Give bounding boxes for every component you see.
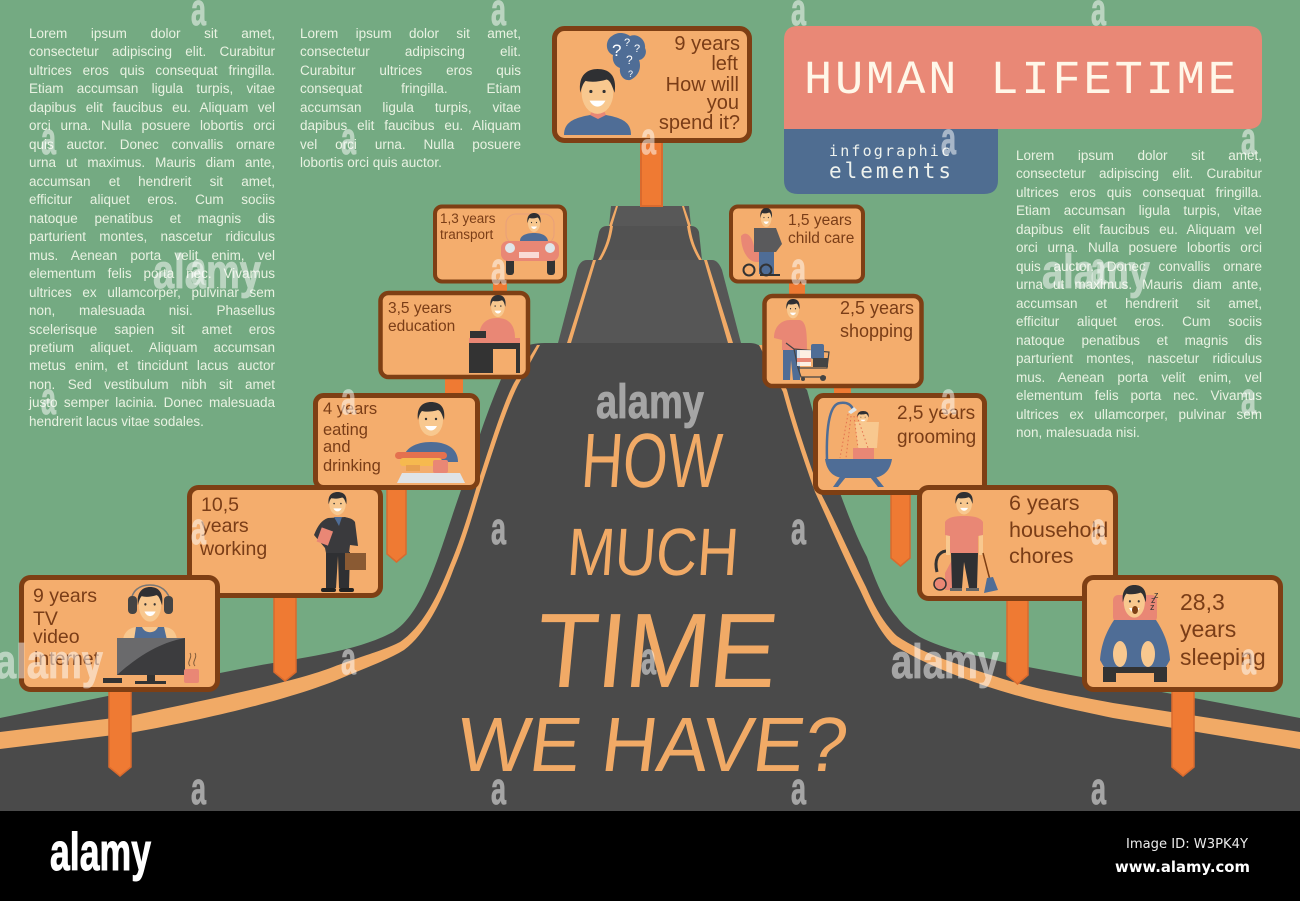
sign: 28,3 years sleeping — [1084, 578, 1280, 776]
text: 9 years left: left — [711, 53, 738, 75]
title banner: Human Lifetime: elements — [829, 159, 951, 183]
text: 2,5 years shopping: 2,5 years — [840, 298, 914, 318]
text: 4 years eating and drinking: eating — [323, 421, 368, 439]
text: 4 years eating and drinking: drinking — [323, 457, 381, 475]
watermark overlay: a — [341, 113, 357, 164]
text: 9 years TV video internet: internet — [34, 648, 100, 670]
watermark overlay: a — [191, 503, 207, 554]
watermark overlay: a — [491, 243, 507, 294]
watermark overlay: a — [341, 373, 357, 424]
sign: 1,3 years transport — [435, 206, 565, 294]
text block: left column: mus. Aenean porta velit enim, vel — [29, 248, 275, 263]
text: 28,3 years sleeping: 28,3 — [1180, 589, 1225, 615]
text block: right column: parturient montes, nascetur ridiculus — [1016, 351, 1262, 366]
text block: left column: scelerisque sapien sit amet eros — [29, 322, 275, 336]
text: 6 years household chores: 6 years — [1009, 491, 1080, 515]
text block: right column: Etiam accumsan ligula turpis, vitae — [1016, 203, 1262, 218]
text: 9 years left: you — [707, 92, 739, 114]
title banner: Human Lifetime: HUMAN LIFETIME — [804, 55, 1236, 108]
sign: 2,5 years shopping — [764, 296, 922, 398]
text: 10,5 years working: working — [199, 538, 267, 560]
icon: sleeping man in bed: z — [1151, 595, 1156, 605]
text block: right column: ultrices ex ullamcorper, pulvinar sem — [1016, 407, 1262, 422]
watermark overlay: a — [1091, 503, 1107, 554]
text block: middle column — [300, 26, 521, 170]
sign: 6 years household chores — [920, 488, 1116, 684]
text block: right column: efficitur aliquet eros. Cum sociis — [1016, 314, 1262, 329]
text block: right column: ultrices eros quis consequat fringilla. — [1016, 185, 1262, 200]
heading: How much time we have?: MUCH — [565, 515, 741, 590]
text block: middle column: consectetur adipiscing elit. — [300, 44, 521, 59]
heading: How much time we have?: HOW — [579, 418, 725, 504]
watermark overlay: a — [1091, 243, 1107, 294]
icon: thinking man: ? — [634, 43, 640, 55]
text block: left column: natoque penatibus et magnis dis — [29, 211, 275, 226]
text block: right column: elementum felis porta nec. Vivamus — [1016, 388, 1262, 403]
icon: sleeping man in bed — [1100, 585, 1170, 682]
sign: 4 years eating and drinking — [316, 396, 478, 562]
text block: left column: urna ut maximus. Mauris diam ante, — [29, 155, 275, 170]
text block: left column: justo semper lacinia. Donec malesuada — [29, 395, 275, 410]
text block: right column: quis auctor. Donec convallis ornare — [1016, 259, 1262, 274]
text block: left column: accumsan et hendrerit sit amet, — [29, 174, 275, 189]
text: 3,5 years education: 3,5 years — [388, 300, 452, 317]
sign: 3,5 years education — [380, 293, 528, 396]
footer band: alamy credit — [0, 811, 1300, 901]
text: 9 years left: How will — [666, 74, 739, 96]
text: 4 years eating and drinking: 4 years — [323, 400, 377, 418]
icon: man with vacuum and broom — [934, 492, 998, 593]
heading: How much time we have?: WE HAVE? — [453, 702, 852, 788]
watermark overlay: a — [191, 763, 207, 814]
sign: 9 years left — [554, 28, 750, 206]
icon: car — [501, 213, 559, 275]
text block: left column: dapibus elit faucibus eu. Aliquam vel — [29, 100, 275, 115]
watermark overlay: a — [1091, 763, 1107, 814]
text block: right column: natoque penatibus et magnis dis — [1016, 333, 1262, 348]
sign: 2,5 years grooming — [816, 396, 984, 566]
text block: right column: orci urna. Nulla posuere lobortis orci — [1016, 240, 1262, 255]
text block: middle column: accumsan ligula turpis, vitae — [300, 100, 521, 115]
text block: left column: consectetur adipiscing elit. Curabitur — [29, 44, 275, 59]
text block: left column — [28, 26, 275, 429]
text block: left column: ultrices ex ullamcorper, pulvinar sem — [29, 285, 275, 300]
footer band: alamy credit: alamy — [50, 823, 151, 882]
text: 6 years household chores: chores — [1009, 544, 1074, 568]
title banner: Human Lifetime — [784, 26, 1262, 194]
watermark overlay: a — [791, 503, 807, 554]
text block: middle column: consequat fringilla. Etiam — [300, 81, 521, 96]
icon: thinking man — [564, 33, 646, 135]
watermark overlay: a — [1241, 633, 1257, 684]
text: 1,5 years child care: 1,5 years — [788, 212, 852, 229]
text block: right column: mus. Aenean porta velit enim, vel — [1016, 370, 1262, 385]
text: 1,3 years transport: transport — [440, 227, 494, 242]
text block: left column: metus enim, et tincidunt lacus auctor — [29, 358, 275, 373]
sign: 10,5 years working — [190, 488, 380, 681]
text: 3,5 years education: education — [388, 318, 455, 335]
watermark overlay: a — [41, 373, 57, 424]
text block: right column: accumsan et hendrerit sit amet, — [1016, 296, 1262, 311]
text: 28,3 years sleeping: years — [1180, 616, 1236, 642]
watermark overlay: alamy — [891, 636, 999, 689]
text: 9 years left: 9 years — [674, 33, 740, 55]
watermark overlay: a — [941, 373, 957, 424]
icon: thinking man: ? — [624, 37, 630, 49]
title banner: Human Lifetime: infographic — [829, 142, 950, 160]
footer band: alamy credit: www.alamy.com — [1115, 858, 1250, 876]
watermark overlay: alamy — [596, 376, 704, 429]
watermark overlay: a — [41, 113, 57, 164]
text block: right column: dapibus elit faucibus eu. Aliquam vel — [1016, 222, 1262, 237]
text: 6 years household chores: household — [1009, 518, 1108, 542]
text block: left column: hendrerit lacus vitae sodales. — [29, 414, 204, 429]
text block: middle column: Lorem ipsum dolor sit amet, — [300, 26, 521, 41]
text block: left column: parturient montes, nascetur ridiculus — [29, 229, 275, 244]
text: 9 years TV video internet: TV — [33, 608, 58, 630]
icon: man with shopping cart — [774, 299, 829, 381]
text block: middle column: lobortis orci quis auctor. — [300, 155, 442, 170]
text: 9 years TV video internet: 9 years — [33, 585, 97, 607]
icon: man eating — [395, 402, 465, 483]
icon: man in bathtub shower — [825, 403, 892, 487]
text block: right column: Lorem ipsum dolor sit amet, — [1016, 148, 1262, 163]
text: 10,5 years working: 10,5 — [201, 494, 239, 516]
icon: thinking man: ? — [628, 69, 633, 79]
text: 1,3 years transport: 1,3 years — [440, 211, 496, 226]
icon: businessman — [314, 492, 366, 592]
icon: sleeping man in bed: z — [1154, 590, 1159, 600]
text: 1,5 years child care: child care — [788, 230, 854, 247]
watermark overlay: a — [1241, 373, 1257, 424]
text block: right column: consectetur adipiscing elit. Curabitur — [1016, 166, 1262, 181]
text block: left column: quis auctor. Donec convallis ornare — [29, 137, 275, 152]
watermark overlay: a — [491, 763, 507, 814]
icon: sleeping man in bed: z — [1150, 602, 1155, 612]
watermark overlay: alamy — [1042, 246, 1150, 299]
text block: left column: non, malesuada nisi. Phasellus — [29, 303, 275, 318]
text block: left column: efficitur aliquet eros. Cum sociis — [29, 192, 275, 207]
text block: left column: Lorem ipsum dolor sit amet, — [29, 26, 275, 41]
watermark overlay: a — [791, 763, 807, 814]
watermark overlay: a — [491, 503, 507, 554]
text block: middle column: vel orci urna. Nulla posuere — [300, 137, 521, 152]
road: lower main section — [0, 206, 1300, 811]
icon: student at desk — [469, 295, 520, 373]
watermark overlay: alamy — [153, 246, 261, 299]
text block: middle column: Curabitur ultrices eros quis — [300, 63, 521, 78]
sign: 9 years TV video internet — [22, 578, 218, 776]
watermark overlay: a — [791, 243, 807, 294]
text block: left column: ultrices eros quis consequat fringilla. — [29, 63, 275, 78]
text block: right column: non, malesuada nisi. — [1016, 425, 1140, 440]
icon: thinking man: ? — [626, 53, 633, 67]
watermark overlay: a — [641, 113, 657, 164]
footer band: alamy credit: Image ID: W3PK4Y — [1126, 837, 1248, 852]
watermark overlay: a — [341, 633, 357, 684]
text: 28,3 years sleeping: sleeping — [1180, 644, 1266, 670]
text: 2,5 years shopping: shopping — [840, 321, 913, 341]
text: 9 years left: spend it? — [659, 112, 740, 134]
text: 2,5 years grooming: grooming — [897, 427, 976, 448]
text block: left column: pretium aliquet. Aliquam accumsan — [29, 340, 275, 355]
watermark overlay: a — [191, 243, 207, 294]
icon: man with stroller — [741, 208, 782, 276]
icon: thinking man: ? — [612, 41, 621, 60]
road edge stripes — [0, 206, 1300, 749]
text block: left column: non. Sed vestibulum nibh sit amet — [29, 377, 275, 392]
text: 10,5 years working: years — [201, 515, 249, 537]
text block: right column — [1016, 148, 1262, 440]
text: 4 years eating and drinking: and — [323, 438, 351, 456]
text block: left column: elementum felis porta nec. Vivamus — [29, 266, 275, 281]
text: 9 years TV video internet: video — [33, 626, 80, 648]
heading: How much time we have? — [453, 418, 852, 788]
text block: left column: Etiam accumsan ligula turpis, vitae — [29, 81, 275, 96]
watermark overlay: a — [1241, 113, 1257, 164]
sign: 1,5 years child care — [731, 206, 863, 296]
watermark overlay: a — [641, 633, 657, 684]
watermark overlay: a — [941, 113, 957, 164]
heading: How much time we have?: TIME — [531, 591, 783, 710]
text block: left column: orci urna. Nulla posuere lobortis orci — [29, 118, 275, 133]
text block: right column: urna ut maximus. Mauris diam ante, — [1016, 277, 1262, 292]
text: 2,5 years grooming: 2,5 years — [897, 403, 975, 424]
text block: middle column: dapibus elit faucibus eu. Aliquam — [300, 118, 521, 133]
icon: man at TV with headphones — [103, 585, 199, 684]
